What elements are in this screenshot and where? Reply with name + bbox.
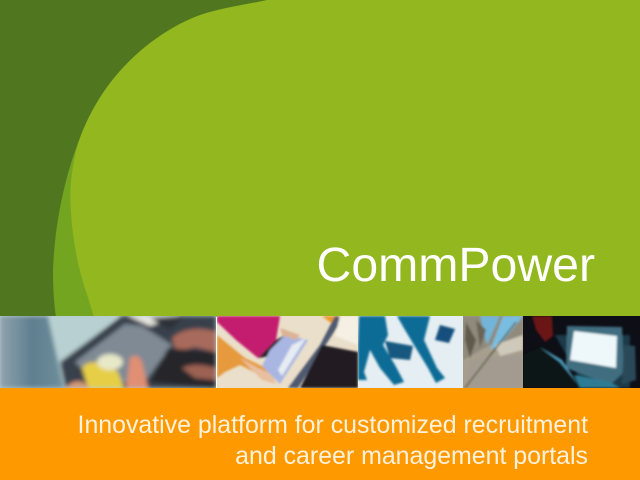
photo: walking business people bbox=[358, 316, 463, 388]
subtitle bbox=[78, 411, 588, 470]
photo: palm leaf bbox=[463, 316, 523, 388]
light green panel with curved edge bbox=[70, 0, 640, 317]
photo: silhouette at computer bbox=[523, 316, 640, 388]
photo: laptop on lap bbox=[217, 316, 358, 388]
photo: hand on keyboard bbox=[0, 316, 216, 388]
orange footer band bbox=[0, 388, 640, 480]
mid green crescent bbox=[53, 128, 120, 317]
photo strip bbox=[0, 316, 640, 388]
subtitle: Innovative platform for customized recruitment bbox=[78, 411, 588, 439]
title: CommPower bbox=[317, 238, 595, 292]
subtitle: and career management portals bbox=[235, 442, 588, 470]
background: dark green bbox=[0, 0, 640, 317]
